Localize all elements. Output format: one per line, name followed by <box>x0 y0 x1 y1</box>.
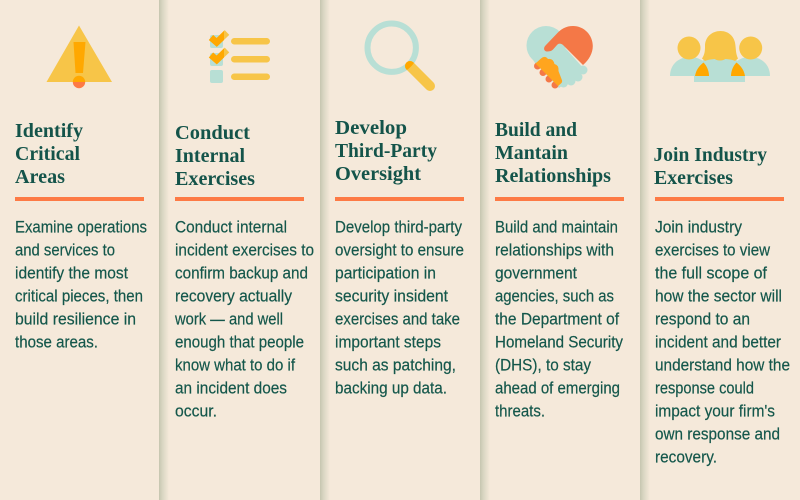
heading: join industry exercises: Join Industry <box>654 144 768 166</box>
icon: warning triangle <box>46 26 112 88</box>
text block: develop third-party oversight: exercises and take <box>335 310 460 328</box>
text block: identify critical areas: those areas. <box>15 332 98 352</box>
text block: join industry exercises: impact your firm's <box>655 402 775 420</box>
text block: develop third-party oversight: participation in <box>335 264 436 282</box>
text block: identify critical areas: and services to <box>15 240 115 260</box>
text block: identify critical areas: critical pieces, then <box>15 286 143 306</box>
text block: join industry exercises: Join industry <box>655 218 742 236</box>
text block: build and maintain relationships: (DHS), to stay <box>495 356 591 374</box>
panel: build and maintain relationships <box>495 26 624 420</box>
text block: develop third-party oversight: oversight to ensure <box>335 240 464 260</box>
text block: conduct internal exercises: confirm backup and <box>175 264 308 282</box>
text block: join industry exercises: understand how the <box>655 356 790 374</box>
heading: identify critical areas: Critical <box>15 143 80 165</box>
heading: conduct internal exercises: Internal <box>175 145 245 167</box>
heading: conduct internal exercises: Conduct <box>175 122 250 144</box>
text block: identify critical areas: Examine operations <box>15 218 147 236</box>
heading: join industry exercises <box>654 144 768 189</box>
text block: conduct internal exercises: an incident does <box>175 378 287 398</box>
text block: build and maintain relationships: Build and maintain <box>495 218 618 236</box>
divider rule <box>15 197 144 201</box>
heading: build and maintain relationships: Build and <box>495 119 578 141</box>
text block: build and maintain relationships: threats. <box>495 402 545 420</box>
text block: conduct internal exercises: recovery actually <box>175 286 292 306</box>
heading: conduct internal exercises: Exercises <box>175 168 255 190</box>
text block: build and maintain relationships <box>495 218 623 420</box>
divider rule <box>655 197 784 201</box>
heading: develop third-party oversight <box>335 117 438 185</box>
text block: build and maintain relationships: agencies, such as <box>495 286 614 306</box>
heading: identify critical areas: Identify <box>15 120 84 142</box>
text block: conduct internal exercises <box>174 218 314 420</box>
text block: develop third-party oversight: security insident <box>335 286 448 306</box>
text block: conduct internal exercises: occur. <box>175 402 217 420</box>
divider rule <box>175 197 304 201</box>
text block: join industry exercises: respond to an <box>655 310 750 328</box>
heading: identify critical areas <box>15 120 84 188</box>
icon: group of people <box>670 31 770 82</box>
heading: build and maintain relationships: Mantain <box>495 142 569 164</box>
text block: build and maintain relationships: ahead of emerging <box>495 378 620 398</box>
text block: identify critical areas: build resilience in <box>15 310 136 328</box>
heading: join industry exercises: Exercises <box>654 167 733 189</box>
divider rule <box>495 197 624 201</box>
text block: develop third-party oversight: Develop third-party <box>335 218 462 236</box>
text block: conduct internal exercises: know what to do if <box>175 356 295 374</box>
panel: join industry exercises <box>654 31 790 466</box>
icon: handshake heart <box>526 26 593 88</box>
divider rule <box>335 197 464 201</box>
panel: identify critical areas <box>15 26 147 352</box>
text block: develop third-party oversight: such as patching, <box>335 356 456 374</box>
text block: join industry exercises: incident and better <box>655 332 781 352</box>
icon: magnifying glass <box>368 24 430 86</box>
text block: join industry exercises: own response and <box>655 424 780 444</box>
text block: build and maintain relationships: government <box>495 264 577 282</box>
text block: conduct internal exercises: Conduct internal <box>175 218 287 236</box>
text block: develop third-party oversight <box>335 218 464 398</box>
text block: conduct internal exercises: incident exercises to <box>175 240 314 260</box>
text block: develop third-party oversight: backing up data. <box>335 378 447 398</box>
heading: develop third-party oversight: Develop <box>335 117 407 139</box>
text block: conduct internal exercises: enough that people <box>175 332 304 352</box>
text block: conduct internal exercises: work — and well <box>174 310 283 328</box>
heading: build and maintain relationships <box>495 119 611 187</box>
text block: build and maintain relationships: relationships with <box>495 240 614 260</box>
text block: join industry exercises <box>655 218 790 466</box>
text block: identify critical areas <box>15 218 147 352</box>
text block: join industry exercises: response could <box>655 378 754 398</box>
icon: checklist <box>210 32 270 83</box>
text block: join industry exercises: exercises to view <box>655 240 771 260</box>
text block: identify critical areas: identify the most <box>15 264 128 282</box>
text block: join industry exercises: recovery. <box>655 448 717 466</box>
panel: conduct internal exercises <box>174 32 314 420</box>
text block: build and maintain relationships: the Department of <box>495 310 619 328</box>
text block: join industry exercises: how the sector will <box>655 286 782 306</box>
heading: develop third-party oversight: Third-Party <box>335 140 438 162</box>
heading: identify critical areas: Areas <box>15 166 65 188</box>
text block: develop third-party oversight: important steps <box>335 332 441 352</box>
heading: develop third-party oversight: Oversight <box>335 163 421 185</box>
text block: build and maintain relationships: Homeland Security <box>495 332 623 352</box>
panel: develop third-party oversight <box>335 24 464 398</box>
heading: conduct internal exercises <box>175 122 255 190</box>
text block: join industry exercises: the full scope of <box>655 264 767 282</box>
heading: build and maintain relationships: Relationships <box>495 165 611 187</box>
